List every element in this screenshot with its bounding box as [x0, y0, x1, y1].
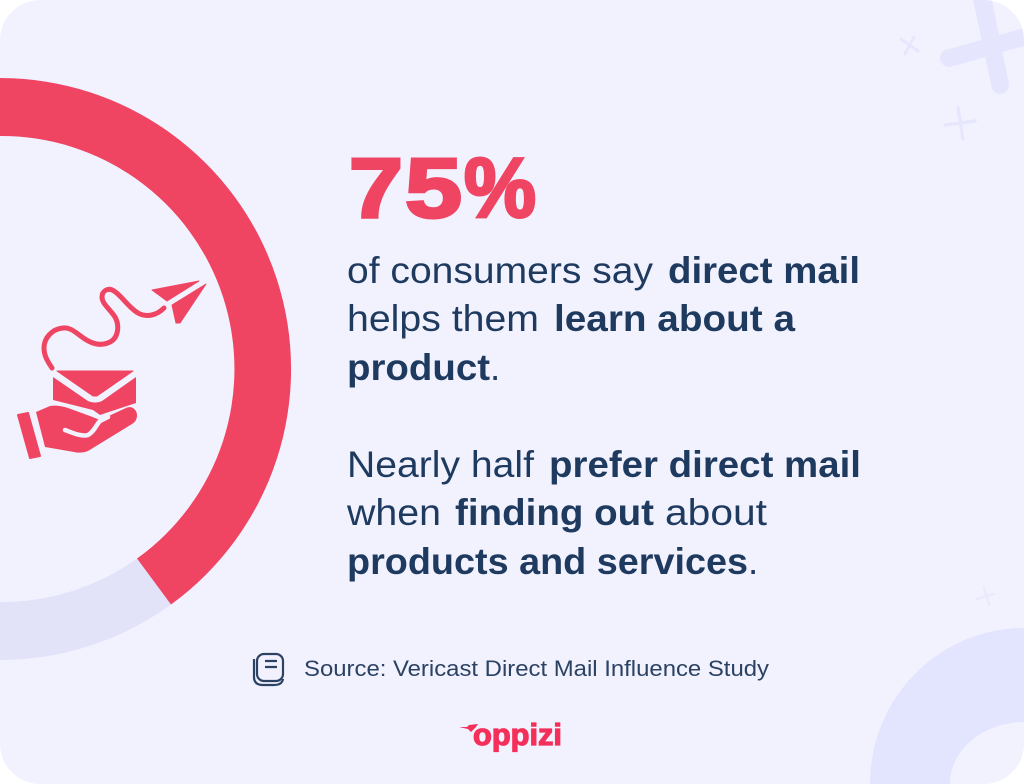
donut remainder segment — [0, 558, 171, 660]
decorative plus: large top right — [940, 0, 1024, 94]
icon: source document stack — [254, 654, 283, 685]
text block: first statement: direct mail — [668, 250, 860, 291]
logo wordmark: oppizi — [473, 717, 562, 752]
logo: oppizi — [459, 717, 562, 752]
text block: second statement: products and services — [347, 541, 748, 582]
text block: first statement: learn about a — [554, 298, 795, 339]
decorative plus: small top — [901, 37, 918, 54]
decorative plus: medium top — [945, 108, 975, 139]
source citation: Source: Vericast Direct Mail Influence Study — [304, 656, 770, 681]
stat: 75%: 7 — [349, 141, 403, 235]
text block: second statement — [346, 444, 861, 582]
icon: hand sending envelope with paper plane — [18, 281, 206, 458]
decorative plus: small right — [977, 588, 994, 605]
text block: second statement: . — [748, 541, 758, 582]
text block: second statement: about — [665, 492, 768, 533]
text block: second statement: when — [346, 492, 441, 533]
stat: 75%: % — [464, 141, 536, 235]
text block: second statement: finding out — [455, 492, 654, 533]
text block: first statement: . — [490, 347, 500, 388]
decorative ring: bottom right — [870, 628, 1024, 784]
donut chart: 75 percent — [0, 78, 291, 660]
stat: 75% — [349, 141, 536, 235]
thumb outline gap — [65, 417, 108, 436]
envelope body — [53, 377, 136, 415]
hand — [36, 406, 137, 453]
text block: first statement: product — [347, 347, 490, 388]
text block: second statement: Nearly half — [347, 444, 535, 485]
stat: 75%: 5 — [405, 141, 462, 235]
text block: first statement: helps them — [347, 298, 539, 339]
text block: second statement: prefer direct mail — [549, 444, 861, 485]
donut highlighted segment — [0, 78, 291, 604]
paper plane — [152, 281, 206, 323]
cuff — [18, 413, 40, 458]
text block: first statement — [347, 250, 860, 388]
logo swoosh — [459, 724, 478, 732]
text block: first statement: of consumers say — [347, 250, 654, 291]
envelope flap — [57, 371, 133, 396]
flight trail — [44, 289, 164, 368]
